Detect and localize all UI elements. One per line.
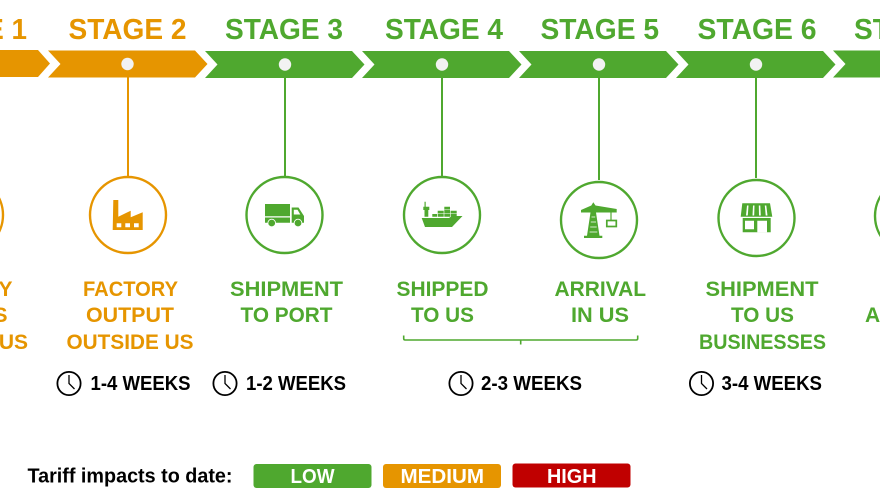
chevron: stage 3: [205, 51, 364, 78]
label: shipment to port: TO PORT: [240, 304, 333, 327]
icon: port crane: [561, 182, 637, 258]
connector: stage 5: [593, 58, 605, 180]
chevron: stage 1: [0, 50, 50, 77]
label: shipped to US: SHIPPED: [396, 278, 488, 301]
heading: stage 4: STAGE 4: [385, 14, 503, 46]
bracket: stages 4 and 5: [404, 336, 638, 344]
icon: truck: [246, 177, 322, 253]
panel: stage 7: [833, 14, 880, 327]
legend: low: [254, 464, 372, 488]
icon: clock: [449, 372, 473, 395]
panel: stage 2: [48, 14, 208, 354]
icon: stage 7 circle: [875, 178, 880, 254]
legend: low: LOW: [290, 465, 335, 488]
label: shipment to US businesses: BUSINESSES: [699, 331, 826, 354]
label: arrival in US: IN US: [571, 304, 629, 327]
heading: stage 5: STAGE 5: [540, 14, 659, 46]
legend heading: Tariff impacts to date:: [28, 466, 232, 488]
label: factory output outside US: [66, 278, 194, 354]
panel: stage 3: [205, 14, 364, 327]
duration: 1-4 weeks: 1-4 WEEKS: [90, 373, 190, 395]
label: shipped to US: [396, 278, 488, 327]
icon: storefront: [718, 180, 794, 256]
icon: clock: [690, 372, 713, 395]
heading: stage 3: STAGE 3: [225, 14, 343, 46]
chevron: stage 2: [48, 50, 208, 78]
heading: stage 6: STAGE 6: [698, 14, 816, 46]
duration: 3-4 weeks: [690, 372, 822, 395]
label: shipment to US businesses: TO US: [731, 304, 794, 327]
heading: stage 2: STAGE 2: [68, 14, 186, 46]
chevron: stage 6: [676, 51, 836, 78]
icon: container ship: [404, 177, 480, 253]
connector: stage 3: [279, 58, 291, 177]
chevron: stage 7: [833, 50, 880, 78]
duration: 1-4 weeks: [57, 372, 191, 395]
connector: stage 2: [121, 58, 134, 177]
panel: stage 5: [519, 14, 678, 327]
label: shipment to port: [230, 278, 343, 327]
panel: stage 1: [0, 14, 50, 354]
label: arrival in US: [554, 278, 646, 327]
label: shipment to US businesses: [699, 278, 826, 354]
chevron: stage 5: [519, 51, 678, 78]
duration: 1-2 weeks: 1-2 WEEKS: [246, 373, 346, 395]
label: shipment to US businesses: SHIPMENT: [706, 278, 819, 301]
label: shipment to port: SHIPMENT: [230, 278, 343, 301]
legend: high: HIGH: [547, 465, 596, 488]
panel: stage 6: [676, 14, 836, 354]
label: shipped to US: TO US: [411, 304, 474, 327]
duration: 2-3 weeks: [449, 372, 582, 395]
legend: tariff impacts: [28, 464, 630, 488]
legend: medium: [383, 464, 501, 488]
label: stage 1: [0, 278, 28, 354]
icon: factory: [90, 177, 166, 253]
label: factory output outside US: OUTSIDE US: [66, 331, 194, 354]
chevron: stage 4: [362, 51, 522, 78]
connector: stage 6: [750, 58, 762, 178]
duration: 3-4 weeks: 3-4 WEEKS: [722, 373, 822, 395]
duration: 2-3 weeks: 2-3 WEEKS: [481, 373, 582, 395]
connector: stage 4: [436, 58, 448, 177]
label: factory output outside US: OUTPUT: [86, 304, 174, 327]
label: factory output outside US: FACTORY: [83, 278, 178, 301]
legend: medium: MEDIUM: [400, 465, 484, 488]
legend: high: [512, 464, 630, 488]
panel: stage 4: [362, 14, 522, 327]
duration: 1-2 weeks: [213, 372, 346, 395]
label: arrival in US: ARRIVAL: [554, 278, 646, 301]
label: stage 7: A: [865, 304, 880, 327]
icon: clock: [57, 372, 81, 395]
icon: stage 1 circle: [0, 177, 3, 253]
icon: clock: [213, 372, 237, 395]
